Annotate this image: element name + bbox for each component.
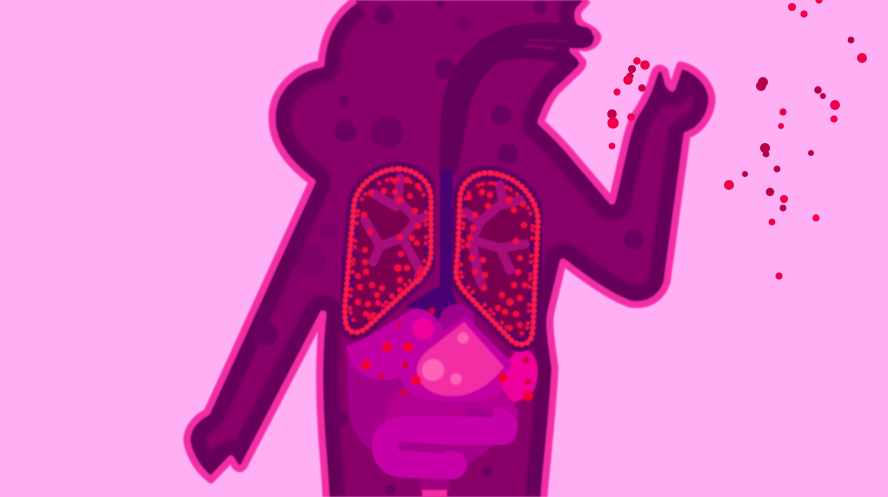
stomach xyxy=(417,322,504,396)
lung particles xyxy=(345,169,431,332)
illustration: human torso with lungs and digestive organs xyxy=(182,0,867,497)
stomach highlights xyxy=(422,332,468,384)
particles near the hand xyxy=(607,57,650,149)
lung particles xyxy=(456,173,538,344)
small intestine xyxy=(386,430,503,465)
pink right organ xyxy=(493,350,538,404)
floating particles: exhaled cloud xyxy=(724,0,867,280)
organ particles xyxy=(361,342,533,401)
band around stomach xyxy=(400,316,512,402)
right lung xyxy=(456,173,538,344)
liver xyxy=(346,308,445,400)
left lung xyxy=(345,169,431,332)
bronchi xyxy=(365,178,428,280)
upper small intestine xyxy=(384,385,518,445)
large intestine backing xyxy=(347,330,515,470)
body spots xyxy=(254,0,644,495)
body silhouette xyxy=(187,0,712,497)
bronchi xyxy=(465,185,525,285)
stem and lower tube xyxy=(420,476,450,491)
windpipe and airways xyxy=(405,23,593,335)
digestive organs xyxy=(346,304,538,497)
infographic frame xyxy=(182,0,867,497)
upper stomach lobe xyxy=(439,304,475,340)
